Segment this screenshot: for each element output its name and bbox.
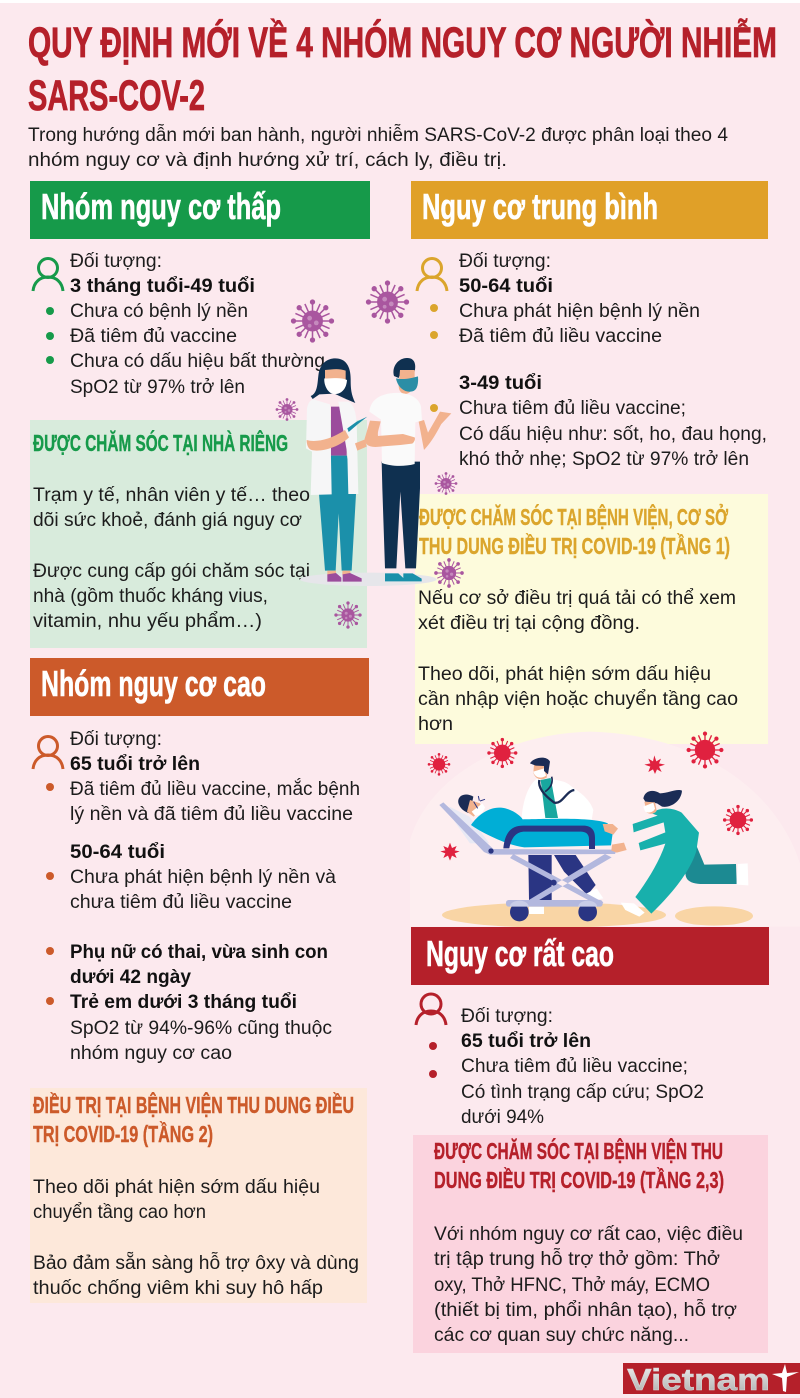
very high risk criteria: Chưa tiêm đủ liều vaccine;	[461, 1056, 688, 1077]
high risk criteria: Đối tượng:	[70, 729, 162, 750]
high risk criteria: Phụ nữ có thai, vừa sinh con	[70, 942, 328, 963]
very high risk header: Nguy cơ rất cao	[426, 933, 614, 974]
medium risk criteria: Đã tiêm đủ liều vaccine	[459, 326, 662, 347]
low risk care box: dõi sức khoẻ, đánh giá nguy cơ	[33, 510, 302, 531]
high risk header: Nhóm nguy cơ cao	[41, 663, 266, 704]
high risk care box	[30, 1088, 367, 1303]
medium risk care box: Nếu cơ sở điều trị quá tải có thể xem	[418, 588, 736, 609]
very high risk criteria: 65 tuổi trở lên	[461, 1031, 591, 1052]
medium risk criteria: Chưa phát hiện bệnh lý nền	[459, 301, 700, 322]
high risk criteria: lý nền và đã tiêm đủ liều vaccine	[70, 804, 353, 825]
icon: person orange	[33, 736, 63, 769]
patient	[449, 794, 613, 847]
logo: Vietnam+	[623, 1362, 800, 1397]
high risk criteria: 65 tuổi trở lên	[70, 754, 200, 775]
high risk criteria: nhóm nguy cơ cao	[70, 1043, 232, 1064]
medium risk criteria: 50-64 tuổi	[459, 276, 553, 297]
low risk care box: Trạm y tế, nhân viên y tế… theo	[33, 485, 310, 506]
high risk header	[30, 658, 369, 716]
high risk criteria: Đã tiêm đủ liều vaccine, mắc bệnh	[70, 778, 360, 800]
high risk criteria	[46, 729, 360, 1064]
high risk care box: Bảo đảm sẵn sàng hỗ trợ ôxy và dùng	[33, 1252, 359, 1274]
high risk criteria: SpO2 từ 94%-96% cũng thuộc	[70, 1018, 332, 1039]
medium risk criteria: khó thở nhẹ; SpO2 từ 97% trở lên	[459, 449, 749, 470]
illustration: patient on stretcher	[410, 732, 800, 928]
intro text: nhóm nguy cơ và định hướng xử trí, cách ly, điều trị.	[28, 150, 507, 171]
title	[28, 18, 777, 120]
intro text: Trong hướng dẫn mới ban hành, người nhiễm SARS-CoV-2 được phân loại theo 4	[28, 124, 728, 146]
low risk header: Nhóm nguy cơ thấp	[41, 186, 281, 227]
very high risk care box: trị tập trung hỗ trợ thở gồm: Thở	[434, 1248, 720, 1270]
very high risk criteria: Có tình trạng cấp cứu; SpO2	[461, 1082, 704, 1103]
high risk criteria: Trẻ em dưới 3 tháng tuổi	[70, 992, 297, 1013]
low risk care box: vitamin, nhu yếu phẩm…)	[33, 611, 262, 632]
low risk criteria	[46, 251, 325, 398]
high risk care box: Theo dõi phát hiện sớm dấu hiệu	[33, 1177, 320, 1198]
low risk criteria: Đã tiêm đủ vaccine	[70, 326, 237, 347]
high risk criteria: 50-64 tuổi	[70, 842, 165, 863]
medium risk care box	[415, 494, 768, 744]
icon: person red	[416, 994, 446, 1025]
high risk criteria: chưa tiêm đủ liều vaccine	[70, 892, 292, 913]
low risk criteria: Chưa có bệnh lý nền	[70, 301, 248, 322]
panel: low risk	[30, 181, 370, 648]
very high risk care box: các cơ quan suy chức năng...	[434, 1325, 689, 1346]
illustration: doctor and patient	[300, 358, 451, 586]
very high risk criteria	[429, 1006, 704, 1128]
nurse	[603, 790, 748, 917]
low risk criteria: SpO2 từ 97% trở lên	[70, 377, 245, 398]
high risk criteria: dưới 42 ngày	[70, 967, 191, 988]
medium risk care box: hơn	[418, 714, 453, 735]
icon: person green	[33, 258, 63, 291]
medium risk criteria: Có dấu hiệu như: sốt, ho, đau họng,	[459, 424, 767, 445]
high risk care box: ĐIỀU TRỊ TẠI BỆNH VIỆN THU DUNG ĐIỀU	[33, 1091, 354, 1118]
medium risk criteria: Chưa tiêm đủ liều vaccine;	[459, 398, 686, 419]
very high risk care box	[413, 1135, 768, 1353]
low risk header	[30, 181, 370, 239]
medium risk care box: Theo dõi, phát hiện sớm dấu hiệu	[418, 664, 711, 685]
very high risk header	[411, 927, 769, 985]
low risk criteria: Chưa có dấu hiệu bất thường	[70, 351, 325, 372]
medium risk criteria: 3-49 tuổi	[459, 373, 542, 394]
high risk criteria: Chưa phát hiện bệnh lý nền và	[70, 867, 336, 888]
medium risk header: Nguy cơ trung bình	[422, 186, 658, 227]
low risk care box: ĐƯỢC CHĂM SÓC TẠI NHÀ RIÊNG	[33, 429, 288, 456]
intro text	[28, 124, 728, 171]
high risk care box: chuyển tầng cao hơn	[33, 1202, 206, 1223]
man figure	[365, 358, 451, 581]
low risk care box	[30, 420, 367, 648]
medium risk criteria: Đối tượng:	[459, 251, 551, 272]
medium risk care box: cần nhập viện hoặc chuyển tầng cao	[418, 689, 738, 710]
low risk care box: nhà (gồm thuốc kháng vius,	[33, 586, 268, 607]
medium risk criteria	[430, 251, 767, 470]
low risk care box: Được cung cấp gói chăm sóc tại	[33, 561, 310, 582]
medium risk header	[411, 181, 768, 239]
stretcher	[439, 802, 617, 921]
very high risk care box: oxy, Thở HFNC, Thở máy, ECMO	[434, 1275, 710, 1296]
very high risk care box: (thiết bị tim, phổi nhân tạo), hỗ trợ	[434, 1299, 737, 1321]
very high risk criteria: Đối tượng:	[461, 1006, 553, 1027]
doctor at stretcher	[522, 758, 603, 914]
high risk care box: thuốc chống viêm khi suy hô hấp	[33, 1278, 323, 1299]
title: SARS-COV-2	[28, 72, 205, 120]
very high risk criteria: dưới 94%	[461, 1107, 544, 1128]
panel: high risk	[30, 658, 369, 1303]
logo: Vietnam+: Vietnam	[627, 1362, 770, 1397]
medium risk care box: xét điều trị tại cộng đồng.	[418, 613, 640, 634]
panel: very high risk	[411, 927, 769, 1353]
doctor figure	[306, 358, 367, 582]
low risk criteria: 3 tháng tuổi-49 tuổi	[70, 276, 255, 297]
purple virus icons	[276, 281, 463, 628]
very high risk care box: Với nhóm nguy cơ rất cao, việc điều	[434, 1224, 743, 1245]
low risk criteria: Đối tượng:	[70, 251, 162, 272]
icon: person amber	[417, 258, 447, 291]
panel: medium risk	[411, 181, 768, 744]
high risk care box: TRỊ COVID-19 (TẦNG 2)	[33, 1120, 213, 1147]
